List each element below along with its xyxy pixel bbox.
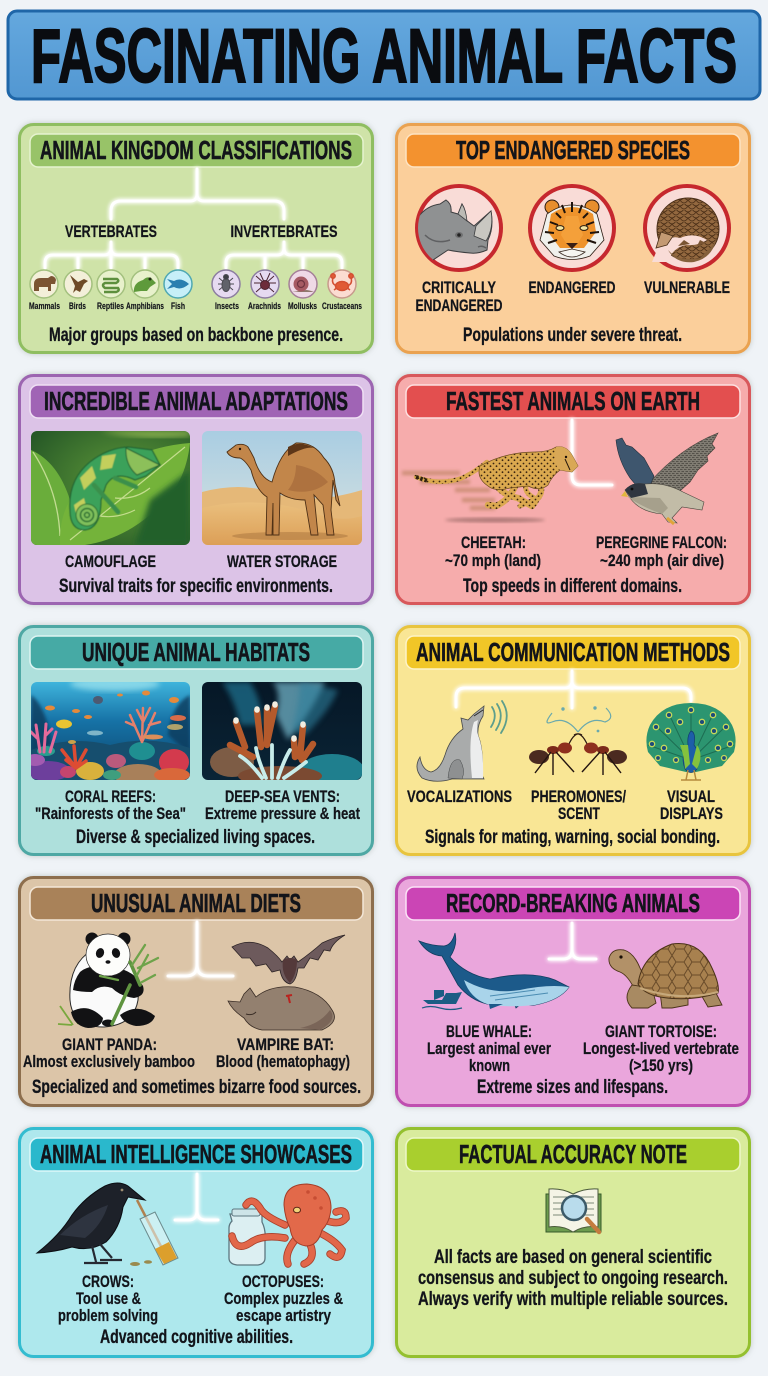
label: vocalizations: VOCALIZATIONS (407, 787, 512, 806)
illustration: vampire bat over sleeping animal (228, 935, 345, 1030)
icon: pangolin (645, 186, 729, 270)
illustration: blue whale and boat (419, 933, 569, 1010)
caption: Advanced cognitive abilities. (100, 1327, 293, 1348)
icon: open book with magnifying glass (546, 1189, 601, 1232)
label: vampire bat: VAMPIRE BAT: (237, 1035, 334, 1054)
label: vampire bat (216, 1035, 350, 1071)
label: coral reefs: CORAL REEFS: (65, 787, 156, 806)
icon: reptiles (97, 270, 125, 298)
panel: unusual animal diets (20, 878, 372, 1106)
icon: fish (164, 270, 192, 298)
label: giant panda: Almost exclusively bamboo (23, 1052, 195, 1071)
icon labels: animal groups: Reptiles (97, 301, 124, 311)
heading: incredible animal adaptations (30, 385, 363, 418)
connectors between status circles (505, 226, 640, 230)
icon: rhino (415, 186, 501, 272)
label: crows: Tool use & (76, 1289, 141, 1308)
panel: animal kingdom classifications (20, 124, 372, 352)
panel: fastest animals on earth (396, 376, 750, 604)
label: vampire bat: Blood (hematophagy) (216, 1052, 350, 1071)
label: critically endangered: ENDANGERED (416, 296, 502, 315)
label: pheromones / scent: SCENT (558, 804, 600, 823)
image: coral reef (31, 682, 190, 780)
label: cheetah speed: ~70 mph (land) (445, 551, 541, 570)
connector (572, 420, 612, 485)
illustration: octopus and jar (229, 1184, 346, 1265)
label: octopuses: OCTOPUSES: (242, 1272, 324, 1291)
label: blue whale (427, 1022, 551, 1075)
illustration: ants with pheromones (529, 706, 627, 775)
label: invertebrates: INVERTEBRATES (230, 222, 338, 241)
caption: Survival traits for specific environments. (59, 576, 333, 597)
heading: animal intelligence showcases: ANIMAL INTELLIGENCE SHOWCASES (40, 1139, 352, 1169)
panel: record-breaking animals (396, 878, 750, 1106)
caption: Diverse & specialized living spaces. (76, 827, 315, 848)
icon: insects (212, 270, 240, 298)
label: giant panda: GIANT PANDA: (62, 1035, 157, 1054)
illustration: crow using a tool (37, 1183, 178, 1266)
panel: animal communication methods (396, 626, 750, 854)
label: cheetah speed (445, 533, 541, 570)
connector (175, 1174, 218, 1220)
icon: mammals (30, 270, 58, 298)
connectors (456, 671, 691, 708)
label: octopuses: escape artistry (236, 1306, 331, 1325)
heading: unique animal habitats: UNIQUE ANIMAL HABITATS (82, 637, 310, 667)
caption: Populations under severe threat. (463, 325, 682, 346)
label: camouflage: CAMOUFLAGE (65, 552, 156, 571)
label: octopuses (224, 1272, 343, 1325)
label: critically endangered (416, 278, 502, 315)
heading: unique animal habitats (30, 636, 363, 669)
label: blue whale: Largest animal ever (427, 1039, 551, 1058)
caption: Major groups based on backbone presence. (49, 325, 343, 346)
icon labels: animal groups (29, 301, 362, 311)
connector (168, 922, 233, 976)
illustration: giant tortoise (609, 944, 722, 1008)
panel: incredible animal adaptations (20, 376, 372, 604)
icon: birds (64, 270, 92, 298)
heading: animal kingdom classifications (30, 134, 363, 167)
label: deep-sea vents (205, 787, 360, 823)
icon labels: animal groups: Mollusks (288, 301, 317, 311)
illustration: peacock (646, 703, 736, 780)
note text (418, 1247, 728, 1310)
illustration: cheetah (402, 447, 578, 522)
image: chameleon on leaf (31, 431, 190, 545)
heading: unusual animal diets: UNUSUAL ANIMAL DIETS (91, 888, 301, 918)
label: giant tortoise (583, 1022, 739, 1075)
icon: mollusks (289, 270, 317, 298)
icon: tiger (530, 186, 614, 270)
label: visual displays: DISPLAYS (660, 804, 723, 823)
connector (549, 923, 596, 959)
label: blue whale: BLUE WHALE: (446, 1022, 532, 1041)
heading: animal intelligence showcases (30, 1138, 363, 1171)
illustration: giant panda eating bamboo (58, 932, 158, 1028)
illustration: peregrine falcon (616, 433, 718, 524)
label: crows: problem solving (58, 1306, 158, 1325)
illustration: howling wolf (417, 701, 507, 781)
caption: Specialized and sometimes bizarre food sources. (32, 1077, 361, 1098)
icon labels: animal groups: Amphibians (126, 301, 164, 311)
icon labels: animal groups: Fish (171, 301, 185, 311)
classification tree connectors (45, 169, 342, 268)
label: falcon speed: ~240 mph (air dive) (600, 551, 724, 570)
heading: unusual animal diets (30, 887, 363, 920)
label: pheromones / scent: PHEROMONES/ (531, 787, 626, 806)
panel: factual accuracy note (396, 1128, 750, 1356)
label: coral reefs: "Rainforests of the Sea" (35, 804, 186, 823)
label: visual displays (660, 787, 723, 823)
label: vulnerable: VULNERABLE (644, 278, 730, 297)
image: deep-sea vents (202, 682, 364, 786)
caption: Extreme sizes and lifespans. (477, 1077, 668, 1098)
panel: animal intelligence showcases (20, 1128, 372, 1356)
icon labels: animal groups: Arachnids (248, 301, 281, 311)
icon: crustaceans (328, 270, 356, 298)
icon: amphibians (131, 270, 159, 298)
label: visual displays: VISUAL (667, 787, 715, 806)
caption: Top speeds in different domains. (463, 576, 682, 597)
label: endangered: ENDANGERED (528, 278, 616, 297)
label: deep-sea vents: Extreme pressure & heat (205, 804, 360, 823)
label: crows (58, 1272, 158, 1325)
panel: top endangered species (396, 124, 750, 352)
label: falcon speed (596, 533, 727, 570)
label: deep-sea vents: DEEP-SEA VENTS: (225, 787, 340, 806)
label: water storage: WATER STORAGE (227, 552, 337, 571)
heading: incredible animal adaptations: INCREDIBLE ANIMAL ADAPTATIONS (44, 386, 348, 416)
icon labels: animal groups: Mammals (29, 301, 60, 311)
label: cheetah speed: CHEETAH: (461, 533, 526, 552)
label: giant panda (23, 1035, 195, 1071)
label: giant tortoise: GIANT TORTOISE: (605, 1022, 717, 1041)
icon labels: animal groups: Birds (69, 301, 86, 311)
label: pheromones / scent (531, 787, 626, 823)
heading: animal kingdom classifications: ANIMAL KINGDOM CLASSIFICATIONS (40, 135, 352, 165)
panel: unique animal habitats (20, 626, 372, 854)
label: crows: CROWS: (82, 1272, 134, 1291)
icon labels: animal groups: Crustaceans (322, 301, 362, 311)
label: giant tortoise: (>150 yrs) (629, 1056, 693, 1075)
label: blue whale: known (469, 1056, 510, 1075)
icon labels: animal groups: Insects (215, 301, 239, 311)
image: camel in desert (202, 431, 362, 545)
label: coral reefs (35, 787, 186, 823)
icon: arachnids (251, 270, 279, 298)
label: critically endangered: CRITICALLY (422, 278, 496, 297)
label: vertebrates: VERTEBRATES (65, 222, 157, 241)
label: octopuses: Complex puzzles & (224, 1289, 343, 1308)
title banner (8, 11, 760, 99)
